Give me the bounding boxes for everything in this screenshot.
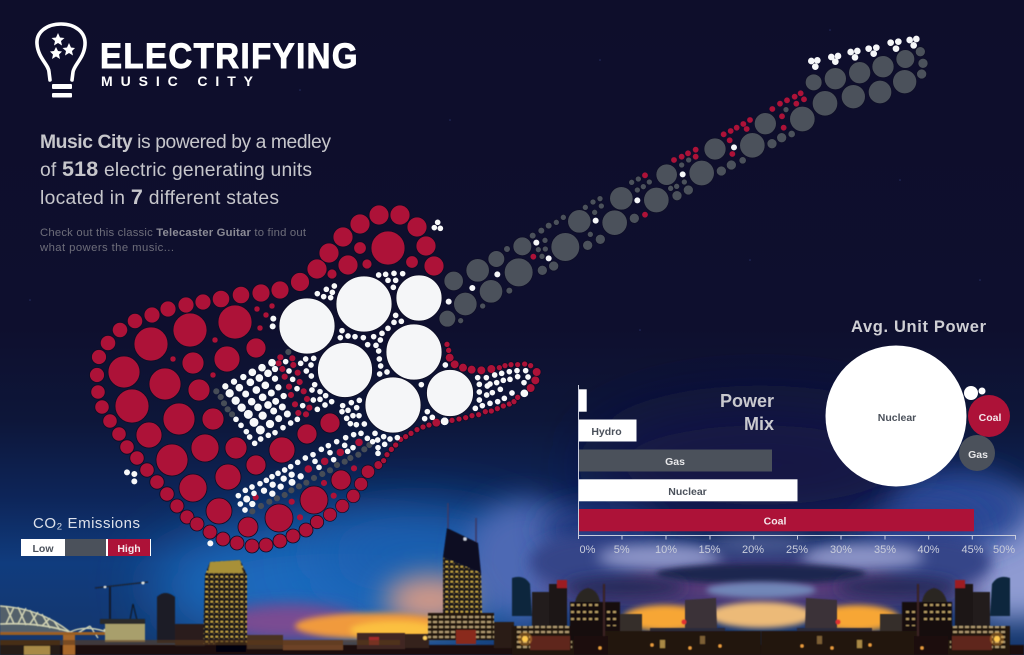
neck: coal and nuclear accent dots (446, 36, 919, 304)
bubble: other (978, 388, 986, 394)
legend high swatch: High (117, 543, 141, 555)
axis labels: 50% (993, 544, 1015, 556)
body: gas accent dots (grey) (214, 349, 372, 514)
axis labels: 5% (614, 544, 630, 556)
logo (37, 24, 358, 98)
intro line 2: of 518 electric generating units (40, 157, 312, 181)
bubble: gas: Gas (968, 449, 988, 461)
bar: nuclear (579, 479, 798, 501)
legend: CO2 emissions (21, 515, 151, 556)
bar: hydro (579, 420, 636, 442)
legend medium swatch (65, 539, 106, 556)
axis labels: 40% (917, 544, 940, 556)
helper line 2: what powers the music... (39, 242, 174, 254)
body: small white dots (124, 220, 530, 546)
bar: hydro: Hydro (591, 426, 622, 438)
neck and headstock: gas units (grey) (439, 47, 928, 327)
intro line 1: Music City is powered by a medley (40, 132, 331, 153)
skyline: left part with bridge and towers (0, 503, 1024, 655)
bar: other (579, 389, 587, 412)
intro text (40, 132, 331, 209)
legend title: CO₂ Emissions (33, 515, 140, 532)
bubble: hydro (964, 386, 978, 400)
axis labels: 25% (786, 544, 808, 556)
title line: Mix: Mix (744, 414, 774, 434)
axis labels: 45% (961, 544, 984, 556)
axis labels: 15% (698, 544, 721, 556)
bar: coal (579, 509, 974, 531)
axis labels: 35% (874, 544, 896, 556)
bubble: coal (968, 395, 1010, 437)
axis labels: 0% (580, 544, 596, 556)
bubble: nuclear: Nuclear (878, 412, 916, 424)
body: coal units (red) (90, 205, 541, 553)
axis labels: 10% (655, 544, 677, 556)
bubble: gas (959, 435, 995, 471)
intro line 3: located in 7 different states (40, 185, 279, 209)
axis labels: 30% (830, 544, 852, 556)
helper text (39, 227, 307, 254)
logo subtitle: MUSIC CITY (101, 73, 254, 89)
icon: light bulb with stars (37, 24, 85, 98)
title: power mix (720, 391, 774, 434)
helper line 1: Check out this classic Telecaster Guitar to find out (40, 227, 307, 239)
bubble: nuclear (826, 346, 966, 486)
bar: nuclear: Nuclear (668, 486, 707, 498)
title line: Power: Power (720, 391, 774, 411)
axis labels: 20% (742, 544, 764, 556)
bar: gas: Gas (665, 456, 685, 468)
bubble: coal: Coal (979, 412, 1001, 424)
title: average unit power: Avg. Unit Power (851, 318, 987, 336)
bar: coal: Coal (764, 516, 786, 528)
skyline: mirrored right part (512, 577, 1010, 655)
body: large nuclear units (white) (279, 275, 474, 433)
axis labels (580, 544, 1015, 556)
bar: gas (579, 450, 772, 472)
logo title: ELECTRIFYING (100, 37, 358, 76)
chart axes (578, 385, 1016, 540)
guitar built from unit bubbles (90, 36, 928, 553)
bubble chart: average unit power (826, 346, 1010, 486)
AT&T Batman tower (428, 503, 514, 648)
bar chart: power mix (578, 385, 1016, 556)
legend low swatch: Low (32, 543, 54, 555)
